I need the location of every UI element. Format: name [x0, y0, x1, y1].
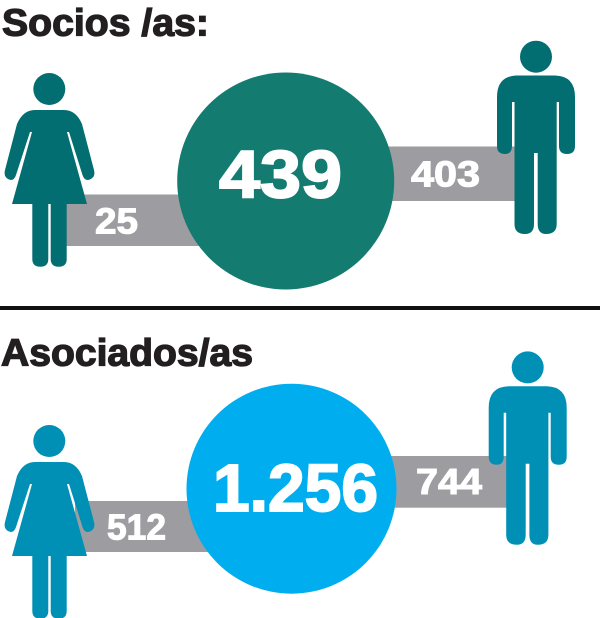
bar: asociadas [75, 501, 215, 552]
circle: total socios [177, 72, 394, 290]
icon: man [489, 351, 567, 545]
bar: asociados [385, 456, 509, 508]
bar: socios [385, 146, 517, 201]
panel: socios [2, 2, 575, 290]
panel: asociados [1, 333, 567, 618]
bar: socias [66, 194, 206, 246]
number: asociadas: 512 [107, 506, 166, 548]
heading: asociados: Asociados/as [1, 333, 253, 375]
circle: total asociados [186, 384, 396, 594]
number: socios: 403 [411, 154, 480, 194]
number: asociados: 744 [416, 461, 482, 502]
heading: socios: Socios /as: [2, 2, 209, 44]
icon: woman [5, 425, 94, 618]
number: total asociados: 1.256 [213, 451, 378, 526]
divider [0, 306, 600, 310]
icon: woman [5, 73, 94, 267]
number: socias: 25 [95, 200, 138, 242]
icon: man [497, 41, 575, 234]
number: total socios: 439 [219, 138, 342, 212]
